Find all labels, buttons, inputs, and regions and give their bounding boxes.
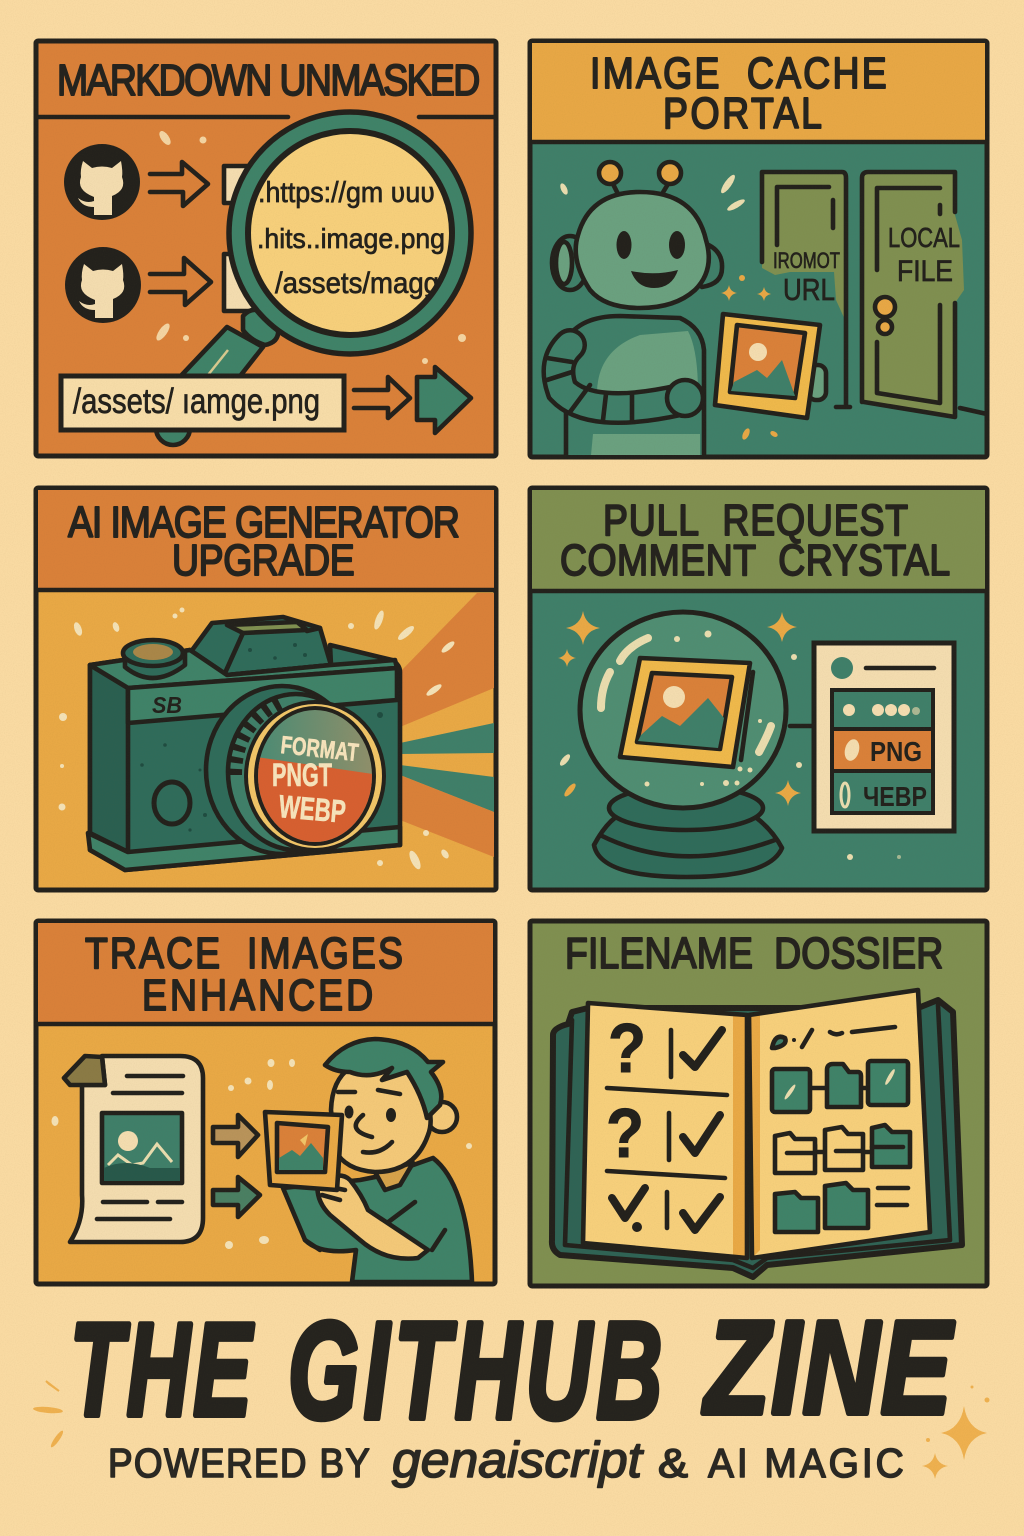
heading: ai image generator upgrade: [68, 497, 460, 585]
highlights: [601, 638, 771, 752]
facial features: [338, 1090, 400, 1153]
magnified url text: [257, 177, 445, 300]
door knob: [875, 297, 895, 334]
button: [154, 782, 190, 824]
label: local file: [888, 222, 960, 288]
left page: [583, 1003, 747, 1258]
arrow: top: [150, 162, 208, 206]
panel: ai image generator upgrade: [36, 488, 496, 890]
comment card: [814, 643, 954, 831]
camera: [88, 617, 400, 870]
prism: [190, 617, 331, 675]
panel: filename dossier: [530, 921, 987, 1286]
panel: trace images enhanced: [36, 921, 495, 1284]
shirt: [283, 1158, 472, 1282]
heading: ai image generator upgrade: AI IMAGE GENERATOR: [68, 497, 460, 547]
subtitle: &: [658, 1440, 688, 1486]
bottom strip: [88, 827, 400, 870]
heading: image cache portal: IMAGE CACHE: [590, 48, 887, 98]
person: [265, 1039, 472, 1282]
forearm and hand: [318, 1175, 428, 1259]
crystal ball base: [594, 786, 782, 877]
face: [616, 231, 685, 288]
label: iromot url: [773, 248, 840, 307]
arrow: green output: [417, 367, 471, 433]
left page checks: ?: [606, 1094, 644, 1172]
right page: [750, 990, 930, 1258]
stars: [558, 611, 801, 806]
subtitle: POWERED BY: [108, 1441, 370, 1486]
torso: [566, 316, 704, 460]
heading: filename dossier: FILENAME DOSSIER: [565, 928, 943, 978]
document stubs: [224, 166, 254, 311]
title: the github zine: [70, 1293, 954, 1448]
light rays: [400, 593, 494, 857]
handheld photo: [265, 1112, 342, 1190]
arrow: to output: [354, 377, 410, 418]
door: remote url: [762, 172, 850, 407]
label: iromot url: IROMOT: [773, 248, 840, 273]
magnified url text: .https://gm ʋuʋ: [258, 177, 435, 209]
hair: [325, 1039, 443, 1118]
heading: pull request comment crystal: PULL REQUEST: [603, 495, 908, 545]
panel: pull request comment crystal: [530, 488, 987, 890]
panel: markdown unmasked: [36, 41, 496, 456]
handle: [156, 310, 278, 445]
front band: [128, 668, 397, 723]
specks: [154, 129, 466, 364]
row: dots: [834, 692, 931, 727]
row: png: [834, 731, 931, 769]
label: local file: LOCAL: [888, 222, 960, 253]
heading: trace images enhanced: [85, 928, 403, 1020]
robot: [547, 162, 722, 460]
specks: [52, 1059, 472, 1249]
heading: trace images enhanced: ENHANCED: [142, 970, 373, 1020]
model badge: SB: [152, 692, 182, 718]
magnified url text: .hits..image.png: [257, 223, 445, 254]
sleeve line: [305, 1202, 445, 1250]
row: webp: [834, 773, 931, 812]
heading: image cache portal: [590, 48, 887, 138]
label: local file: FILE: [897, 255, 953, 288]
icon: github logo bottom: [65, 247, 141, 323]
picture frame tablet: [715, 314, 826, 418]
cover: [552, 1000, 962, 1277]
scatter dots: [558, 654, 901, 860]
subtitle: AI MAGIC: [708, 1441, 904, 1486]
path label bar: [61, 376, 344, 430]
folders: [772, 1061, 910, 1232]
antennae: [599, 162, 681, 194]
ears: [552, 236, 722, 290]
icon: github logo top: [64, 144, 140, 220]
head: [576, 192, 709, 308]
label: iromot url: URL: [783, 272, 835, 307]
dial: [123, 640, 185, 678]
left page checks: ?: [608, 1009, 646, 1087]
heading: pull request comment crystal: [560, 495, 950, 585]
heading: trace images enhanced: TRACE IMAGES: [85, 928, 403, 978]
ear: [427, 1102, 457, 1132]
glint: [783, 1068, 896, 1101]
gold sparkles: [721, 275, 779, 441]
crystal ball: [580, 612, 786, 808]
framed picture: [620, 658, 753, 767]
magnified url text: /assets/magg: [275, 267, 439, 300]
specks: [58, 608, 456, 871]
picture: [102, 1113, 182, 1183]
open book: [552, 990, 962, 1277]
lens labels: WEBP: [277, 788, 347, 830]
right page header: [772, 1027, 895, 1048]
row: png: PNG: [870, 736, 922, 767]
lens labels: FORMAT: [279, 731, 360, 767]
left side: [90, 665, 128, 852]
title: the github zine: ZINE: [702, 1295, 954, 1442]
document lines: [97, 1076, 183, 1219]
face: [331, 1068, 431, 1172]
subtitle: genaiscript: [392, 1432, 644, 1488]
heading: image cache portal: PORTAL: [663, 88, 822, 138]
camera body: [90, 645, 400, 870]
lens face: [244, 700, 386, 852]
decorative sparkles: [33, 1381, 990, 1479]
sparkles: [559, 173, 746, 213]
lens labels: PNGT: [272, 757, 332, 793]
top plate: [90, 650, 397, 688]
row: webp: ЧEBP: [863, 781, 927, 812]
panel: image cache portal: [530, 41, 987, 460]
document: [64, 1056, 203, 1242]
heading: ai image generator upgrade: UPGRADE: [172, 535, 355, 585]
magnifying glass: [156, 112, 471, 445]
heading: markdown unmasked: MARKDOWN UNMASKED: [57, 55, 480, 105]
arrow: tan: [213, 1115, 258, 1157]
title: the github zine: THE: [70, 1296, 254, 1443]
connector: [790, 724, 814, 728]
path label bar: /assets/ ıamge.png: [73, 382, 320, 421]
arm: [547, 345, 703, 420]
arrow: teal: [213, 1177, 260, 1217]
lens labels: [272, 731, 360, 830]
speckle: [140, 712, 383, 832]
collar: [375, 1163, 413, 1190]
arrow: middle: [150, 258, 211, 305]
globe sparkle dots: [644, 630, 762, 786]
heading: pull request comment crystal: COMMENT CRYSTAL: [560, 535, 950, 585]
door: local file: [862, 172, 987, 417]
title: the github zine: GITHUB: [288, 1293, 662, 1448]
left page checks: [606, 1009, 727, 1232]
lens barrel: [206, 686, 364, 854]
subtitle: [108, 1432, 904, 1488]
